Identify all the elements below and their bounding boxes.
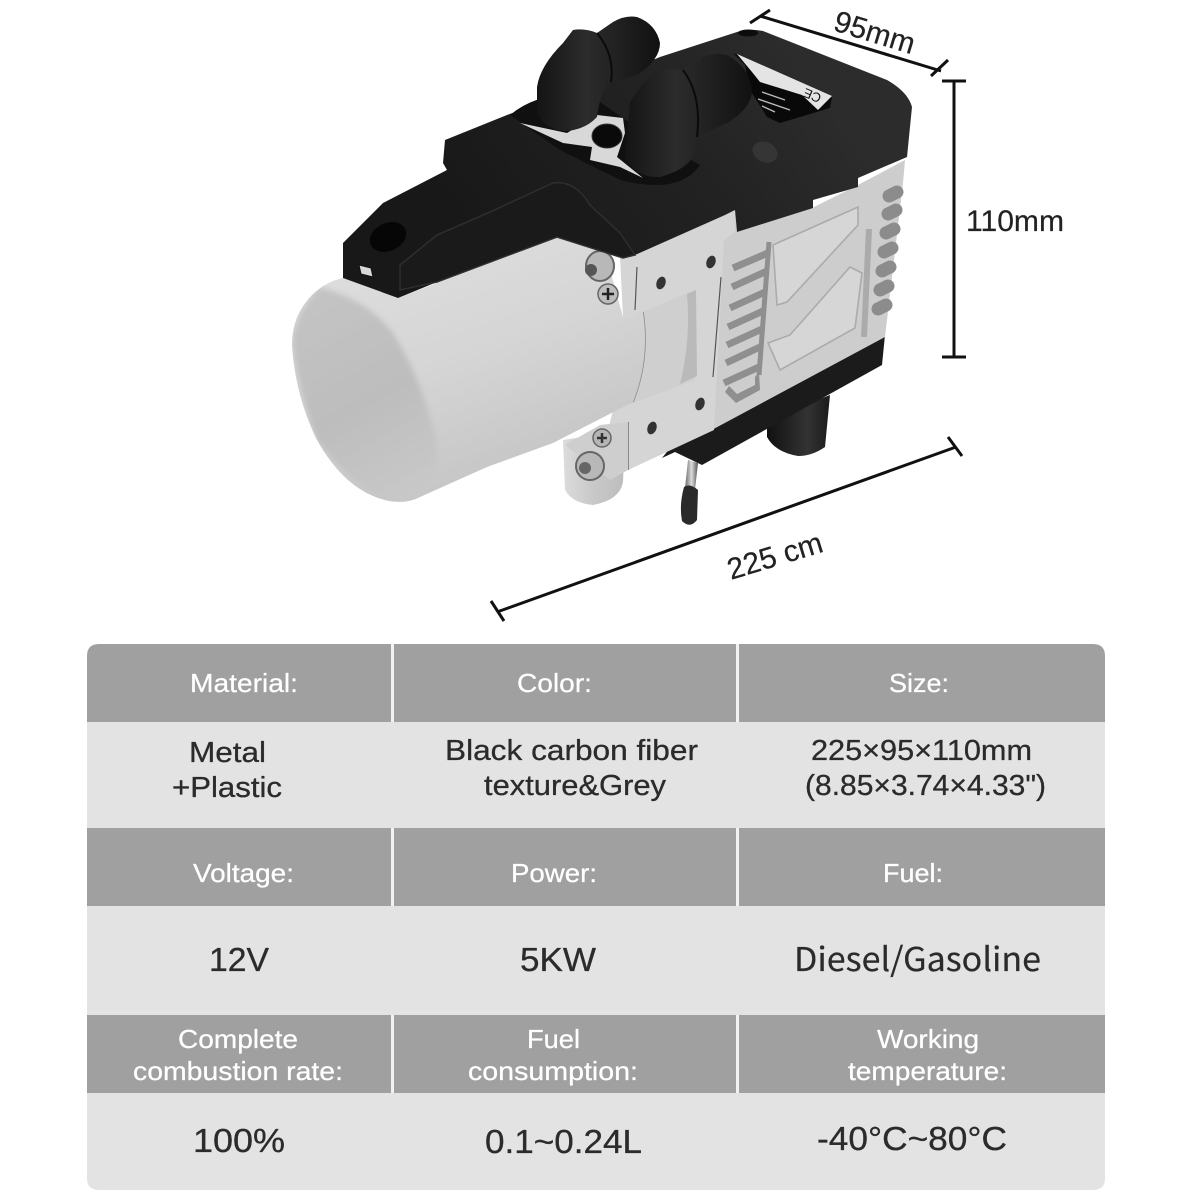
exhaust port: [767, 395, 830, 456]
row 1 values: +Plastic: [172, 772, 282, 804]
top cover front ridge: [400, 183, 635, 290]
body right fins: [878, 192, 897, 309]
recess around hoses: [510, 94, 700, 185]
row 3 values: 0.1~0.24L: [485, 1123, 642, 1160]
row 1 headers: [190, 668, 949, 698]
row 3 headers: [133, 1024, 1007, 1086]
row 3 values: -40°C~80°C: [817, 1120, 1007, 1157]
clamp: [598, 210, 735, 480]
dimension: 95mm: [750, 5, 948, 76]
row 2 values: 5KW: [520, 941, 597, 978]
row 1 values: [172, 735, 1046, 804]
dimension: 110mm: [942, 81, 1064, 357]
row 1 values: Metal: [189, 737, 266, 769]
row 3 values: 100%: [193, 1122, 285, 1159]
dimension: 225 cm: [491, 437, 962, 621]
row 3 headers: Fuel: [527, 1024, 580, 1054]
row 3 headers: consumption:: [468, 1056, 638, 1086]
body vent slots: [724, 242, 769, 403]
metal plate under hoses: [520, 115, 643, 178]
row 2 headers: Fuel:: [883, 858, 943, 888]
left hose: [537, 17, 660, 131]
embossed panel lower: [768, 267, 862, 370]
row 2 values: 12V: [209, 941, 269, 978]
cover screw recess: [738, 30, 758, 36]
row 1 values: 225×95×110mm: [811, 735, 1032, 767]
body groove: [864, 229, 869, 337]
dimension: 110mm: 110mm: [966, 205, 1064, 238]
label sticker: CE: [801, 85, 823, 106]
row 1 headers: Material:: [190, 668, 298, 698]
black top cover: [343, 30, 912, 298]
row 2 values: [209, 933, 1041, 981]
metal body: [610, 160, 905, 470]
row 1 values: (8.85×3.74×4.33"): [805, 770, 1046, 802]
dimension: 95mm: 95mm: [830, 5, 919, 61]
label sticker: [733, 53, 832, 123]
fuel pipe: [681, 460, 698, 525]
row 1 values: Black carbon fiber: [445, 735, 698, 767]
row 2 headers: Power:: [511, 858, 597, 888]
bolts: [576, 251, 618, 480]
row 3 headers: temperature:: [848, 1056, 1007, 1086]
right hose: [625, 54, 752, 177]
embossed panel upper: [773, 207, 858, 305]
nose hole: [365, 216, 411, 258]
cylinder end cap: [292, 287, 432, 476]
dimension: 225 cm: 225 cm: [723, 526, 827, 587]
nose window: [359, 265, 373, 277]
hex bolt: [592, 124, 622, 148]
row 3 values: [193, 1120, 1007, 1160]
product photo: water heater: [292, 17, 912, 525]
row 1 headers: Color:: [517, 668, 592, 698]
row 2 values: Diesel/Gasoline: [794, 933, 1041, 981]
row 1 headers: Size:: [889, 668, 949, 698]
specification table: [87, 644, 1105, 1190]
row 1 values: texture&Grey: [484, 770, 667, 802]
cover bump: [749, 137, 781, 167]
table background rows: [87, 644, 1105, 1190]
lower black base: [662, 335, 885, 465]
clamp holes: [646, 254, 717, 436]
row 2 headers: [193, 858, 943, 888]
row 3 headers: Working: [877, 1024, 979, 1054]
row 2 headers: Voltage:: [193, 858, 294, 888]
cylinder housing: [292, 235, 645, 502]
lower connector stem: [563, 430, 625, 505]
row 3 headers: combustion rate:: [133, 1056, 343, 1086]
row 3 headers: Complete: [178, 1024, 298, 1054]
